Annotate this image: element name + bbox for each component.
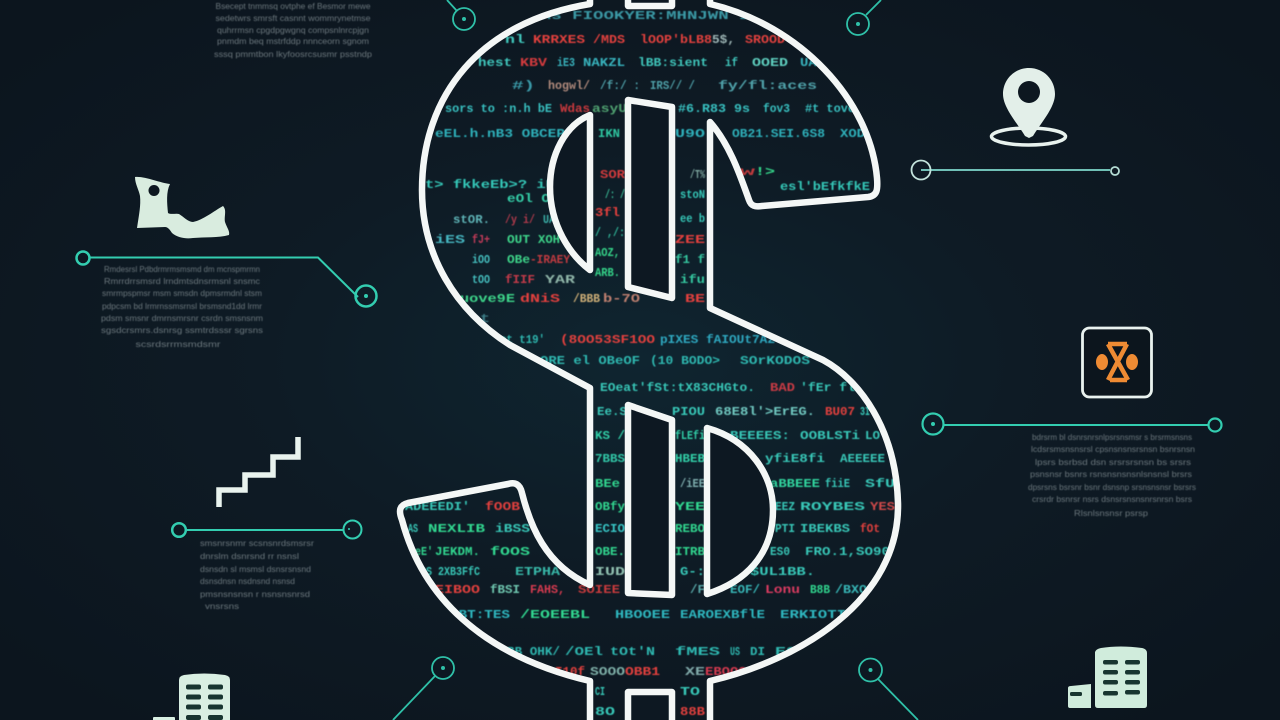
dollar sign code text fill: I10f <box>555 665 585 679</box>
dollar sign code text fill: UAS <box>800 56 825 70</box>
dollar sign code text fill: OBT:TES <box>450 608 510 622</box>
dollar sign code text fill: UA <box>543 213 556 227</box>
paragraph: left: pdpcsm bd lrmrnssmsrnsl brsmsnd1dd lrmr <box>102 302 262 311</box>
dollar sign code text fill: G-: <box>680 565 705 579</box>
dollar sign code text fill: XOH <box>538 233 560 247</box>
dollar sign code text fill: eEL.h.nB3 OBCEP <box>435 127 565 141</box>
dollar sign code text fill: eOl O <box>507 192 550 206</box>
dollar sign code text fill: f1 f <box>675 253 705 267</box>
dollar sign code text fill: /iEE <box>680 477 705 491</box>
dollar sign code text fill: #6.R83 9s <box>678 102 750 116</box>
dollar sign code text fill: stOR. <box>453 213 490 227</box>
dollar sign code text fill: fiiE <box>825 477 850 491</box>
dollar sign code text fill: BEEEES: <box>730 429 790 443</box>
dollar sign code text fill: /EOEEBL <box>520 608 590 622</box>
dollar sign code text fill: fov3 <box>763 102 790 116</box>
dollar sign code text fill: ADEEEDI' <box>405 500 470 514</box>
dollar sign code text fill: CI <box>595 685 605 699</box>
dollar sign code text fill: DI <box>750 645 765 659</box>
dollar sign code text fill: !> <box>755 165 775 179</box>
dollar sign code text fill: AS <box>408 522 418 536</box>
dollar sign code text fill: iES <box>435 233 465 247</box>
dollar sign code text fill: aBBEEE <box>770 477 820 491</box>
dollar sign code text fill: fMES <box>675 645 720 659</box>
dollar sign code text fill: ZEE <box>675 233 705 247</box>
dollar sign code text fill: /BBB <box>573 292 600 306</box>
dollar sign code text fill: BB OHK/ <box>507 645 560 659</box>
lower right half disc <box>707 428 773 594</box>
dollar sign code text fill: nl <box>505 33 525 47</box>
upper left half disc <box>550 115 590 270</box>
lower center slot <box>628 405 672 595</box>
dollar sign code text fill: KBV <box>520 56 548 70</box>
dollar sign code text fill: #) <box>512 79 535 93</box>
dollar sign code text fill: ECIO <box>595 522 625 536</box>
dollar sign code text fill: if <box>725 56 738 70</box>
dollar sign code text fill: fIIF <box>505 273 535 287</box>
dollar sign code text fill: ot t19' <box>500 333 545 347</box>
dollar sign code text fill: 5$, <box>712 33 735 47</box>
dollar sign code text fill: SOOO <box>590 665 625 679</box>
dollar sign code text fill: fBSI <box>490 583 520 597</box>
dollar sign code text fill: /OEl <box>565 645 603 659</box>
dollar sign code text fill: OS 2XB3FfC <box>420 565 480 579</box>
icon: location pin <box>992 68 1066 145</box>
paragraph: stairs: dsnsdn sl msmsl dsnsrsnsnd <box>200 565 311 574</box>
dollar sign code text fill: IRS// / <box>650 79 695 93</box>
dollar sign code text fill: ES0 <box>770 545 790 559</box>
dollar sign code text fill: fOt <box>860 522 880 536</box>
dollar sign code text fill: 7BBS <box>595 452 625 466</box>
dollar sign code text fill: nnns FIOOKYER:MHNJWN 1# <box>520 9 760 23</box>
dollar sign code text fill: U9O <box>675 127 705 141</box>
dollar sign code text fill: OBE. <box>595 545 625 559</box>
dollar sign code text fill: YAR <box>545 273 576 287</box>
dollar sign code text fill: ROYBES <box>800 500 865 514</box>
bottom stub slot <box>628 692 672 720</box>
paragraph: right: dpsrsns bsrsnr bsnr dsnsnp srsnsnsnsr bsrsrs <box>1028 483 1196 492</box>
dollar sign code text fill: IUD <box>595 565 625 579</box>
paragraph: left: Rmdesrsl Pdbdrmrmsmsmd dm mcnspmrmn <box>104 265 260 274</box>
dollar sign code text fill: PIOU <box>672 405 705 419</box>
dollar sign code text fill: OBe <box>507 253 530 267</box>
dollar sign code text fill: 3I <box>860 405 870 419</box>
paragraph: stairs <box>200 539 314 611</box>
dollar sign code text fill <box>405 9 895 719</box>
paragraph: top left: sssq pmmtbon lkyfoosrcsusmr psstndp <box>214 50 373 59</box>
dollar sign outline <box>400 0 898 720</box>
connector: top left <box>447 0 475 30</box>
dollar sign code text fill: ifu <box>680 273 705 287</box>
dollar sign code text fill: OOED <box>752 56 788 70</box>
dollar sign code text fill: $UL1BB. <box>750 565 815 579</box>
dollar sign code text fill: eE' <box>415 545 433 559</box>
dollar sign code text fill: iBSS <box>495 522 530 536</box>
dollar sign code text fill: PTI <box>775 522 795 536</box>
dollar sign code text fill: ETPHA <box>515 565 561 579</box>
dollar sign code text fill: EAROEXBflE <box>680 608 765 622</box>
dollar sign code text fill: FAHS, <box>530 583 565 597</box>
dollar sign code text fill: SOIEE <box>578 583 620 597</box>
dollar sign code text fill: uove9E <box>460 292 515 306</box>
dollar sign code text fill: dNiS <box>520 292 560 306</box>
dollar sign code text fill: EOF/ <box>730 583 760 597</box>
icon: building bottom right <box>1068 646 1147 708</box>
dollar sign code text fill: SOR <box>600 168 626 182</box>
paragraph: top left: pnmdm beq mstrfddp nnnceorn sgnom <box>217 37 369 46</box>
dollar sign code text fill: fJ+ <box>472 233 490 247</box>
dollar sign code text fill: /FOO <box>690 583 720 597</box>
dollar sign code text fill: Wdas <box>560 102 590 116</box>
paragraph: top left: quhrrmsn cpgdpgwgnq compsnlnrcpjgn <box>217 26 369 35</box>
dollar sign code text fill: JEKDM. <box>435 545 480 559</box>
icon: building bottom left <box>153 674 230 720</box>
dollar sign code text fill: ee b <box>680 212 705 226</box>
dollar sign code text fill: 88B <box>680 705 705 719</box>
dollar sign code text fill: LO <box>865 429 880 443</box>
dollar sign code text fill: 68E8l'>ErEG. <box>715 405 815 419</box>
dollar sign code text fill: fOOS <box>490 545 530 559</box>
dollar sign code text fill: Lonu <box>765 583 800 597</box>
dollar sign code text fill: YES <box>870 500 895 514</box>
paragraph: top left: Bsecept tnmmsq ovtphe ef Besmor mewe <box>216 2 371 11</box>
paragraph: right: crsrdr bsnrsr nsrs dsnsrsnsnsnrsnrsn bsrs <box>1032 495 1192 504</box>
dollar sign code text fill: tOt'N <box>610 645 655 659</box>
dollar sign code text fill: esl'bEfkfkE <box>780 180 870 194</box>
connector: stairs <box>172 520 362 538</box>
paragraph: stairs: smsnrsnmr scsnsnrdsmsrsr <box>200 539 314 548</box>
dollar sign code text fill: ORE el OBeOF <box>540 354 640 368</box>
dollar sign code text fill: EOOEI <box>775 645 830 659</box>
dollar sign code text fill: (10 BODO> <box>650 354 720 368</box>
connector: top right <box>847 0 881 35</box>
paragraph: left: pdsm smsnr dmrnsmrsnr csrdn smsnsnm <box>101 314 263 323</box>
dollar sign code text fill: BU07 <box>825 405 855 419</box>
dollar sign code text fill: /y i/ <box>505 213 535 227</box>
dollar sign code text fill: AEEEEE <box>840 452 885 466</box>
connector: left <box>76 252 376 306</box>
dollar sign code text fill: YEE <box>675 500 705 514</box>
icon: blob shape <box>135 177 229 238</box>
dollar sign code text fill: BAD <box>770 381 795 395</box>
dollar sign code text fill: BEe <box>595 477 620 491</box>
dollar sign code text fill: t> fkkeEb>? iU <box>425 178 555 192</box>
dollar sign code text fill: lOOP'bLB8 <box>640 33 712 47</box>
dollar sign code text fill: sors to :n.h bE <box>445 102 552 116</box>
dollar sign code text fill: b-7O <box>603 292 640 306</box>
dollar sign code text fill: fLEfi <box>675 429 705 443</box>
dollar sign code text fill: NEXLIB <box>428 522 485 536</box>
dollar sign code text fill: EBOOO3 <box>705 665 755 679</box>
connector: bottom left <box>393 657 454 720</box>
paragraph: right: Rlsnlsnsnsr psrsp <box>1074 509 1149 518</box>
dollar sign code text fill: -IRAEY <box>530 253 571 267</box>
paragraph: stairs: pmsnsnsnsn r nsnsnsnrsd <box>200 590 310 599</box>
dollar sign code text fill: OUT <box>507 233 530 247</box>
dollar sign code text fill: hogwl/ <box>548 79 590 93</box>
dollar sign code text fill: hest <box>478 56 512 70</box>
icon: orange symbol box <box>1082 328 1152 397</box>
dollar sign code text fill: pIXES fAIOUt7A2 <box>660 333 775 347</box>
dollar sign code text fill: B8B <box>810 583 830 597</box>
upper center slot <box>628 100 672 298</box>
dollar sign code text fill: tOO <box>472 273 490 287</box>
dollar sign code text fill: lBB:sient <box>638 56 708 70</box>
dollar sign code text fill: HBOOEE <box>615 608 670 622</box>
dollar sign code text fill: ARB. <box>595 266 620 280</box>
dollar sign code text fill: OBfy <box>595 500 625 514</box>
dollar sign code text fill: fy/fl:aces <box>718 79 817 93</box>
paragraph: left: scsrdsrrmsmdsmr <box>136 340 221 349</box>
dollar sign code text fill: /f:/ : <box>600 79 640 93</box>
dollar sign code text fill: yfiE8fi <box>765 452 825 466</box>
dollar sign code text fill: KS / <box>595 429 625 443</box>
dollar sign code text fill: /T% <box>690 168 706 182</box>
dollar sign code text fill: NAKZL <box>583 56 625 70</box>
dollar sign code text fill: fOOB <box>485 500 520 514</box>
dollar sign code text fill: EOeat'fSt:tX83CHGto. <box>600 381 755 395</box>
dollar sign code text fill: ERKIOTIEE <box>780 608 865 622</box>
paragraph: top left: sedetwrs smrsft casnnt wommrynetmse <box>216 14 371 23</box>
dollar sign code text fill: OBB1 <box>625 665 660 679</box>
dollar sign code text fill: BE <box>685 292 705 306</box>
dollar sign code text fill: FRO.1,SO90 <box>805 545 890 559</box>
dollar sign code text fill: EEZ <box>775 500 795 514</box>
paragraph: right <box>1028 433 1196 518</box>
dollar sign code text fill: XOD <box>840 127 865 141</box>
paragraph: left: Rmrrdrrsmsrd lrndmtsdnsrmsnl snsmc <box>104 277 260 286</box>
dollar sign code text fill: iE3 <box>557 56 575 70</box>
paragraph: stairs: vnsrsns <box>205 602 239 611</box>
paragraph: right: lpsrs bsrbsd dsn srsrsrsnsn bs srsrs <box>1035 458 1191 467</box>
dollar sign code text fill: stoN <box>680 188 705 202</box>
dollar sign code text fill: ITRB <box>675 545 705 559</box>
paragraph: right: lcdsrsmsnsnsrsl cpsnsnsnsrsnsn bsnrsnsn <box>1031 445 1195 454</box>
dollar sign code text fill: SOrKODOS <box>740 354 810 368</box>
paragraph: stairs: dsnsdnsn nsdnsnd nsnsd <box>200 577 295 586</box>
paragraph: left: sgsdcrsmrs.dsnrsg ssmtrdsssr sgrsns <box>101 326 263 335</box>
dollar sign code text fill: 3fl <box>595 206 620 220</box>
dollar sign code text fill: /: / <box>605 188 625 202</box>
dollar sign code text fill: IBEKBS <box>800 522 850 536</box>
dollar sign code text fill: OB21.SEI.6S8 <box>732 127 825 141</box>
dollar sign code text fill: Ee.S <box>597 405 627 419</box>
top stub slot <box>628 0 672 6</box>
paragraph: right: bdrsrm bl dsnrsnrsnlpsrsnsmsr s brsrmsnsns <box>1032 433 1192 442</box>
dollar sign code text fill: TO <box>680 685 700 699</box>
dollar sign code text fill: 8O <box>595 705 615 719</box>
dollar sign code text fill: SfU <box>865 477 895 491</box>
dollar sign code text fill: OOBLSTi <box>800 429 860 443</box>
dollar sign code text fill: AOZ, <box>595 246 620 260</box>
paragraph: left: smrmpspmsr msm smsdn dpmsrmdnl stsm <box>102 289 262 298</box>
dollar sign code text fill: st <box>470 312 490 326</box>
dollar sign code text fill: EIBOO <box>435 583 480 597</box>
dollar sign code text fill: / ,/: <box>595 226 625 240</box>
dollar sign code text fill: KRRXES <box>533 33 585 47</box>
dollar sign code text fill: (8OO53SF1OO <box>560 333 655 347</box>
dollar sign code text fill: /BXOO <box>835 583 875 597</box>
paragraph: top left <box>214 2 373 59</box>
dollar sign code text fill: w <box>740 165 757 179</box>
dollar sign code text fill: #t tove <box>805 102 855 116</box>
dollar sign code text fill: 'fEr fl <box>800 381 855 395</box>
dollar sign code text fill: US <box>730 645 740 659</box>
connector: right <box>922 414 1222 434</box>
dollar sign code text fill: SROOD <box>745 33 785 47</box>
dollar sign code text fill: IKN <box>598 127 620 141</box>
dollar sign code text fill: HBEB <box>675 452 705 466</box>
paragraph: right: psnsnsr bsnrs rsnsnsnsnsnlsnsnsl brsrs <box>1030 470 1192 479</box>
connector: bottom right <box>859 658 918 720</box>
paragraph: left <box>101 265 263 349</box>
dollar sign code text fill: REBO <box>675 522 705 536</box>
connector: pin <box>912 160 1119 180</box>
icon: stairs <box>219 437 298 507</box>
dollar sign code text fill: iOO <box>472 253 490 267</box>
dollar sign code text fill: /MDS <box>593 33 625 47</box>
paragraph: stairs: dnrslm dsnrsnd rr nsnsl <box>200 552 299 561</box>
dollar sign code text fill: asyU <box>592 102 627 116</box>
dollar sign code text fill: XE <box>685 665 705 679</box>
